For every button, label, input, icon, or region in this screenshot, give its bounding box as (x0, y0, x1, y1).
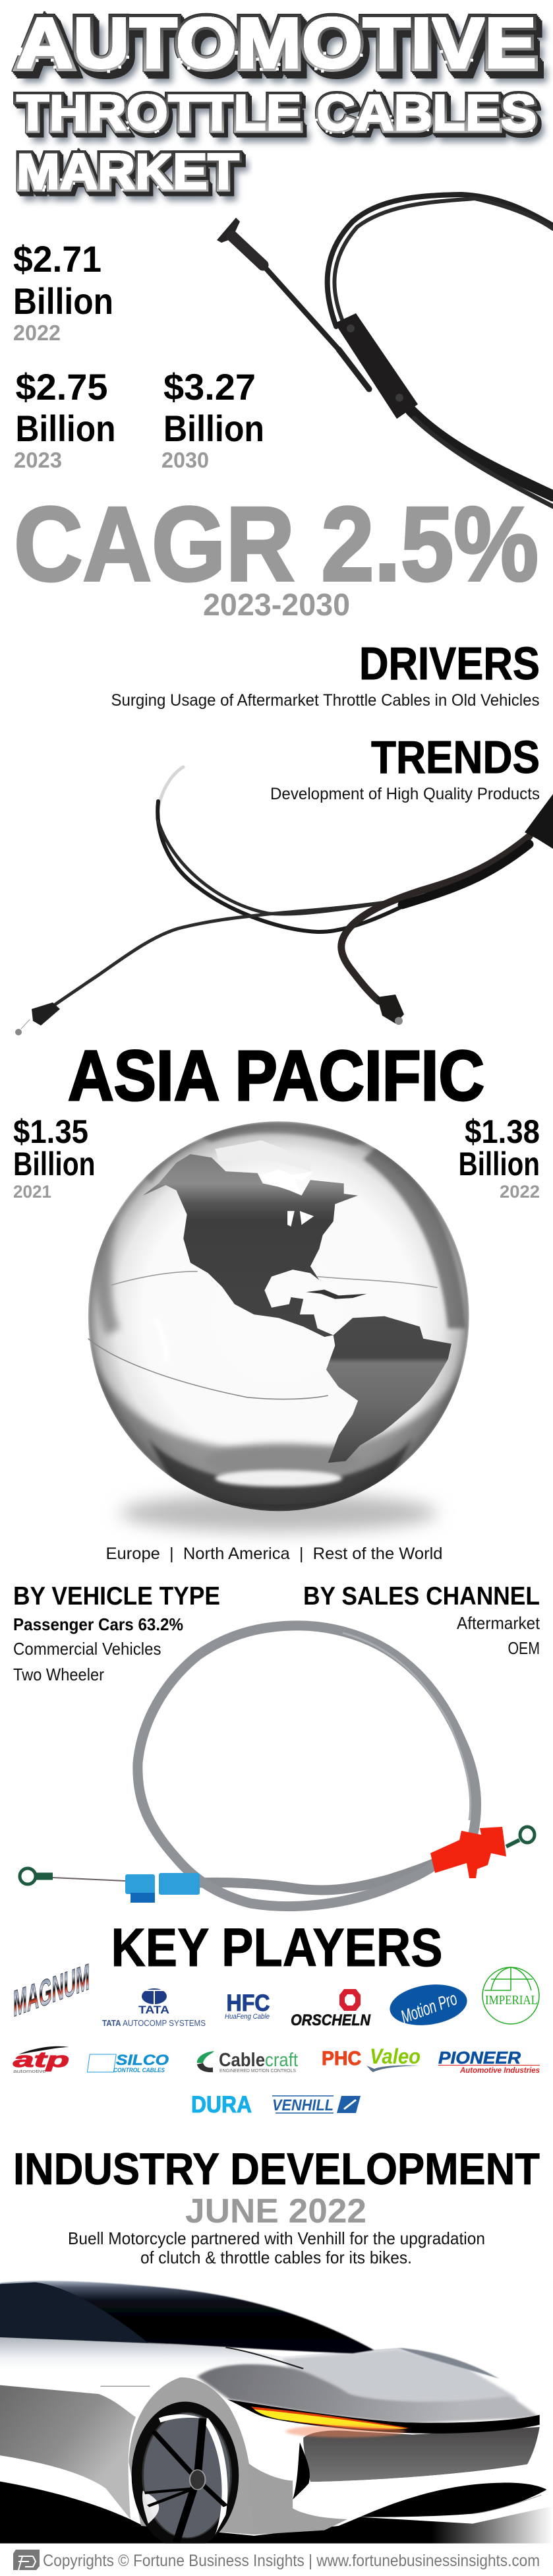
other regions: Europe | North America | Rest of the World (105, 1545, 443, 1563)
logo: Motion Pro (387, 1980, 470, 2030)
logo: Pioneer: Automotive Industries (459, 2066, 540, 2075)
logo: Tata AutoComp (102, 1988, 206, 2028)
stat: 2021 regional value: 2021 (13, 1182, 51, 1202)
stat: 2030 value: $3.27 (163, 366, 256, 408)
stat: 2023 value: 2023 (14, 448, 62, 472)
title (16, 3, 537, 200)
image: long black cables (15, 767, 553, 1035)
logo: Cablecraft: ENGINEERED MOTION CONTROLS (219, 2069, 296, 2073)
drivers text: Surging Usage of Aftermarket Throttle Cables in Old Vehicles (111, 691, 539, 710)
development text: Buell Motorcycle partnered with Venhill for the upgradation (68, 2228, 485, 2248)
logo: HFC: HuaFeng Cable (225, 2013, 270, 2021)
stat: 2022 value: 2022 (13, 321, 61, 345)
stat: 2030 value: 2030 (161, 448, 209, 472)
title line: Automotive: AUTOMOTIVE (16, 3, 537, 82)
logo: Cablecraft (197, 2050, 298, 2073)
stat: 2023 value: Billion (16, 408, 116, 449)
segment heading: vehicle type: BY VEHICLE TYPE (13, 1582, 220, 1610)
logo: Venhill: VENHILL (272, 2097, 334, 2114)
logo: Silco: SILCO (116, 2052, 169, 2068)
title line: Throttle Cables: THROTTLE CABLES (16, 85, 537, 141)
stat: 2022 value: $2.71 (13, 238, 102, 280)
icon: Hudson Bay and Arctic (215, 1140, 314, 1227)
stat: 2023 value (14, 366, 116, 472)
logo: Silco: CONTROL CABLES (113, 2067, 165, 2073)
trends text: Development of High Quality Products (270, 785, 540, 803)
logo: Pioneer (438, 2048, 540, 2075)
stat: 2021 regional value (13, 1113, 95, 1202)
image: grey cable with red and blue ends (20, 1626, 535, 1907)
development text (68, 2228, 485, 2267)
development text: of clutch & throttle cables for its bikes. (140, 2248, 412, 2267)
logo: Cablecraft: Cablecraft (219, 2050, 298, 2071)
stat: 2030 value: Billion (163, 408, 264, 449)
footer (13, 2550, 540, 2570)
image: black throttle cable with clamp (217, 195, 553, 506)
vehicle type list: Commercial Vehicles (13, 1639, 161, 1659)
stat: 2022 value: Billion (13, 280, 113, 322)
logo: Imperial (482, 1967, 539, 2024)
logo: ATP: automotive (13, 2070, 46, 2074)
sales channel list: OEM (508, 1638, 540, 1658)
vehicle type list (13, 1614, 183, 1684)
region heading: ASIA PACIFIC (68, 1035, 484, 1115)
vehicle type list: Two Wheeler (13, 1665, 104, 1684)
stat: 2021 regional value: $1.35 (13, 1113, 88, 1150)
continent: South America (326, 1316, 451, 1463)
sales channel list (457, 1613, 540, 1658)
logo: Tata AutoComp: TATA AUTOCOMP SYSTEMS (102, 2018, 206, 2028)
logos panel (13, 1956, 540, 2118)
key players heading: KEY PLAYERS (111, 1918, 443, 1978)
logos panel: MAGNUM (13, 1956, 90, 2025)
icon: Caribbean islands (306, 1290, 367, 1299)
stat: 2022 value (13, 238, 113, 345)
sales channel list: Aftermarket (457, 1613, 540, 1633)
logo: HFC: HFC (227, 1990, 270, 2016)
logo: Tata AutoComp: TATA (138, 2004, 169, 2016)
stat: 2022 regional value: 2022 (500, 1182, 540, 1202)
logo: Motion Pro: Motion Pro (398, 1988, 459, 2027)
logo: PHC Valeo: Valeo (370, 2044, 421, 2068)
logo: Pioneer: PIONEER (438, 2048, 521, 2068)
logo: Imperial: IMPERIAL (485, 1993, 538, 2008)
vehicle type list: Passenger Cars 63.2% (13, 1614, 183, 1634)
stat: 2022 regional value (459, 1113, 540, 1202)
image: silver concept car (0, 2281, 553, 2549)
logo: Silco (87, 2052, 169, 2073)
title line: Market: MARKET (16, 144, 239, 200)
stat: 2021 regional value: Billion (13, 1146, 95, 1182)
logo: Orscheln: ORSCHELN (291, 2011, 371, 2029)
logo: Orscheln (291, 1989, 371, 2029)
logo: ATP: atp (13, 2048, 69, 2071)
logo: ATP (13, 2046, 69, 2074)
logo: Dura: DURA (191, 2092, 252, 2118)
stat: 2023 value: $2.75 (16, 366, 108, 408)
image: glass globe (84, 1121, 473, 1532)
logo: PHC Valeo (322, 2044, 421, 2072)
CAGR period: 2023-2030 (203, 587, 350, 622)
icon: Fortune Business Insights logo (13, 2550, 40, 2570)
stat: 2030 value (161, 366, 264, 472)
stat: 2022 regional value: $1.38 (465, 1113, 540, 1150)
logo: PHC Valeo: PHC (322, 2048, 361, 2070)
continent: North America (143, 1154, 358, 1337)
date: JUNE 2022 (185, 2192, 366, 2230)
